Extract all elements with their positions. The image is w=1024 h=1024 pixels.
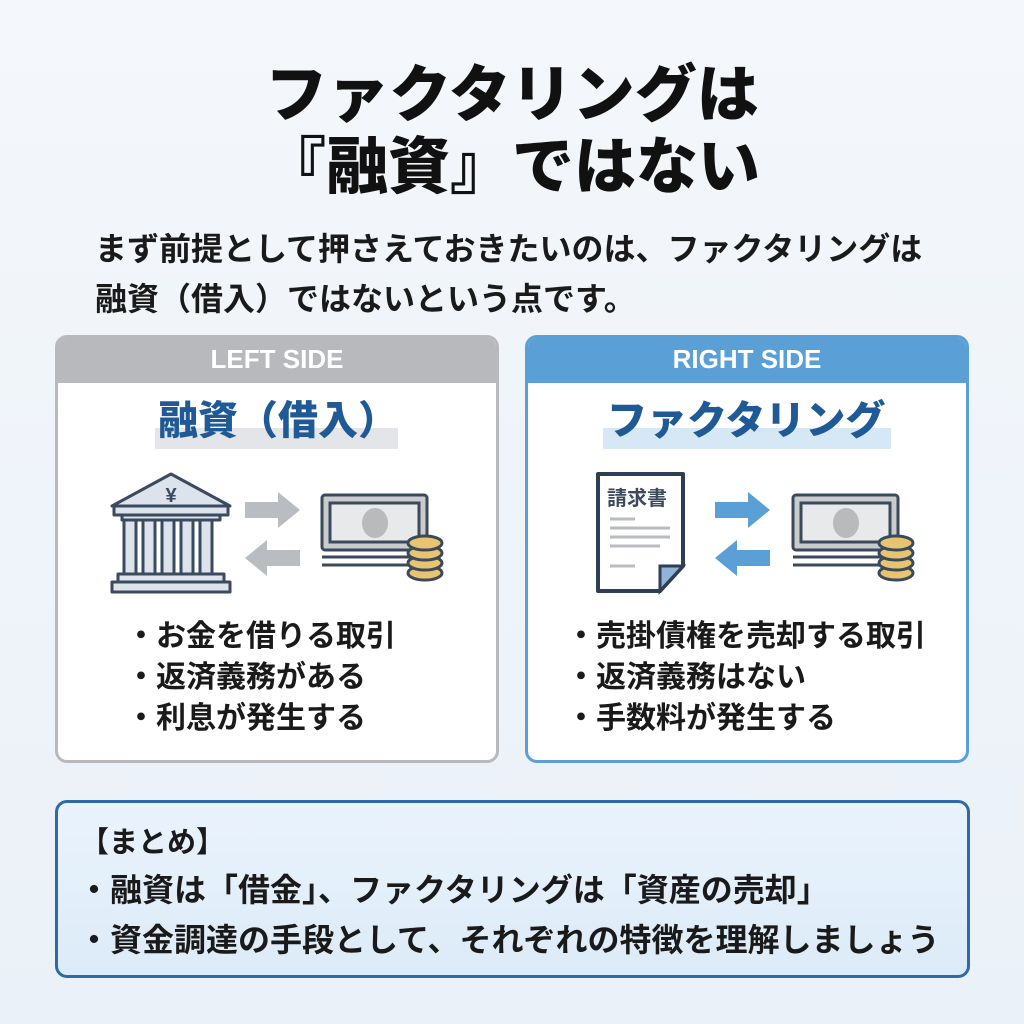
arrows: right exchange [715,492,770,576]
right header: RIGHT SIDE [673,344,821,374]
right bullets [566,620,926,735]
left bullets [126,620,396,735]
panel: left side loan [55,335,499,763]
icon: invoice: 請求書 [607,482,667,511]
left bullets: ・返済義務がある [126,661,366,694]
subtitle text: 融資（借入）ではないという点です。 [95,281,636,317]
icon: bank [110,472,232,594]
right bullets: ・手数料が発生する [566,702,836,735]
right heading highlight [603,428,891,449]
left heading: 融資（借入） [158,399,398,443]
left header: LEFT SIDE [211,344,343,374]
arrows: left exchange [245,492,300,576]
left header [55,335,499,383]
summary text: ・融資は「借金」、ファクタリングは「資産の売却」 [78,872,829,908]
summary text [78,872,939,958]
left bullets: ・お金を借りる取引 [126,620,396,653]
right bullets: ・売掛債権を売却する取引 [566,620,926,653]
panel: summary [55,800,970,978]
right header [525,335,969,383]
icon: invoice [596,472,686,595]
right bullets: ・返済義務はない [566,661,806,694]
title: ファクタリングは [265,61,759,130]
icon: money left [320,494,444,582]
left bullets: ・利息が発生する [126,702,366,735]
title [264,61,760,202]
subtitle text: まず前提として押さえておきたいのは、ファクタリングは [95,231,922,267]
summary text: ・資金調達の手段として、それぞれの特徴を理解しましょう [78,922,939,958]
title: 『融資』ではない [264,133,760,202]
subtitle text [95,231,922,317]
left heading highlight [155,428,398,449]
icon: money right [792,494,914,582]
panel: right side factoring [525,335,969,763]
icon: bank: ¥ [165,485,177,507]
right heading: ファクタリング [607,399,885,443]
summary heading: 【まとめ】 [80,827,225,859]
